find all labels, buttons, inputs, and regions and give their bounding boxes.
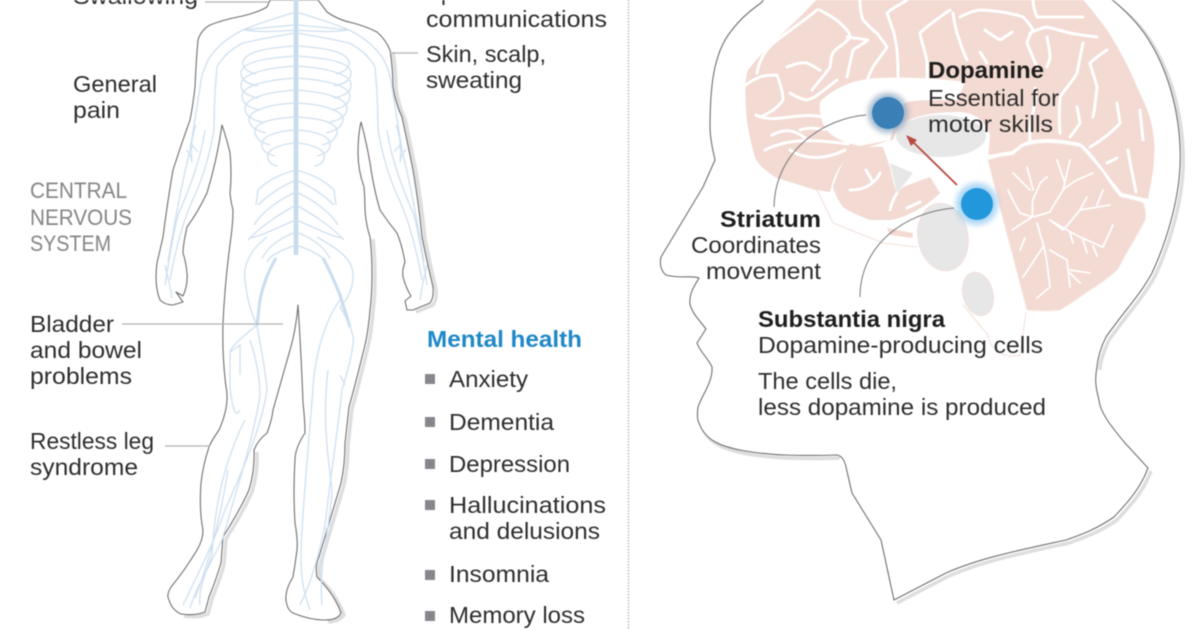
text: restless leg syndrome: syndrome [30,454,138,480]
text: dopamine: Dopamine [928,57,1044,83]
text: bladder and bowel problems: Bladder [30,311,114,337]
panel: body and nervous system [122,0,436,622]
text: skin, scalp, sweating: Skin, scalp, [426,41,546,67]
list items: Dementia [449,409,554,435]
brain: temporal lobe [775,147,940,247]
icon: substantia nigra glowing dot [956,183,998,225]
brain: cerebellum [988,143,1145,311]
panel: mental health list [425,326,606,628]
text: restless leg syndrome [30,428,154,480]
text: striatum: movement [706,258,822,284]
text: skin, scalp, sweating: sweating [426,67,522,93]
text: central nervous system: CENTRAL [30,178,127,203]
head silhouette [660,0,1183,603]
list items: Depression [449,451,570,477]
text: substantia nigra: Substantia nigra [758,306,945,332]
text: central nervous system: SYSTEM [30,231,111,256]
list items: Insomnia [449,561,549,587]
list items: Hallucinations [449,492,606,518]
leader lines: striatum and substantia nigra [774,115,954,297]
text: skin, scalp, sweating [426,41,546,93]
list items: and delusions [449,518,600,544]
text: general pain: General [73,71,157,97]
list bullets [425,374,435,621]
leader lines [122,2,418,446]
text: dopamine [928,57,1059,137]
heading: mental health: Mental health [427,326,582,352]
text: bladder and bowel problems: problems [30,363,132,389]
text: bladder and bowel problems [30,311,142,389]
text: general pain [73,71,157,123]
text: substantia nigra: less dopamine is produced [758,394,1046,420]
text: striatum: Striatum [720,206,821,232]
brain: grey structures [890,115,1026,356]
list items: Memory loss [449,602,585,628]
text: speech and communications: communications [426,6,607,32]
body silhouette [156,0,436,622]
nerves [165,0,427,610]
text: substantia nigra: Dopamine-producing cells [758,332,1043,358]
text: general pain: pain [73,97,120,123]
text: central nervous system [30,178,132,256]
panel: head and brain [660,0,1183,603]
brain: cerebrum [743,0,1154,199]
text: dopamine: Essential for [928,85,1059,111]
text: bladder and bowel problems: and bowel [30,337,142,363]
text: central nervous system: NERVOUS [30,205,132,230]
arrow: dopamine pathway [906,135,957,185]
list items [449,366,606,628]
text: substantia nigra [758,306,1046,420]
text: dopamine: motor skills [928,111,1053,137]
brain: inner white matter [820,78,1024,345]
text: substantia nigra: The cells die, [758,368,897,394]
list items: Anxiety [449,366,529,392]
text: striatum [691,206,822,284]
text: striatum: Coordinates [691,232,821,258]
text: restless leg syndrome: Restless leg [30,428,154,454]
icon: striatum glowing dot [868,93,908,133]
